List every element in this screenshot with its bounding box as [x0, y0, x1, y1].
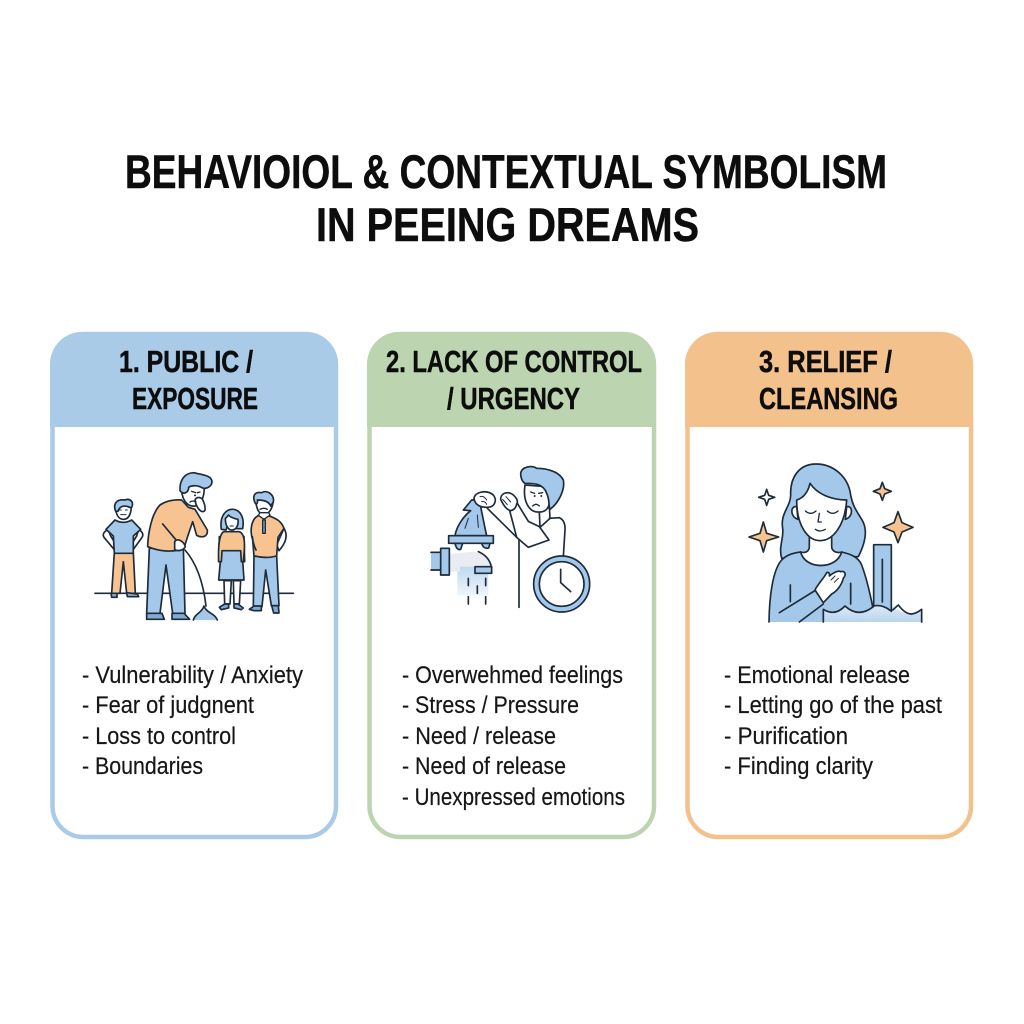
- list: public exposure meanings: - Fear of judgnent: [82, 692, 254, 719]
- heading: 2. LACK OF CONTROL: [386, 345, 642, 379]
- icon: person, overflowing faucet and clock: [431, 467, 590, 612]
- card frame: [688, 334, 971, 837]
- heading: CLEANSING: [759, 382, 898, 416]
- list: lack of control meanings: - Need of release: [402, 753, 566, 780]
- list: lack of control meanings: - Need / release: [402, 723, 556, 750]
- icon: calm woman with sparkles and water: [749, 464, 922, 622]
- heading: [386, 345, 642, 416]
- heading: EXPOSURE: [132, 382, 258, 416]
- heading: 3. RELIEF /: [759, 345, 892, 379]
- panel: public exposure: [50, 332, 338, 837]
- list: relief cleansing meanings: - Letting go of the past: [724, 692, 942, 719]
- panel: relief cleansing: [685, 332, 973, 837]
- heading: [119, 345, 258, 416]
- list: relief cleansing meanings: - Purification: [724, 723, 848, 750]
- list: public exposure meanings: - Boundaries: [82, 753, 203, 780]
- list: public exposure meanings: - Vulnerability / Anxiety: [82, 662, 304, 689]
- list: public exposure meanings: [82, 662, 304, 780]
- list: lack of control meanings: - Unexpressed emotions: [402, 784, 625, 811]
- list: lack of control meanings: [402, 662, 625, 811]
- header band: [685, 332, 973, 427]
- heading: [759, 345, 898, 416]
- icon: embarrassed man watched by onlookers: [95, 473, 293, 620]
- header band: [50, 332, 338, 427]
- title: IN PEEING DREAMS: [316, 198, 699, 251]
- header band: [367, 332, 656, 427]
- heading: 1. PUBLIC /: [119, 345, 253, 379]
- panel: lack of control: [367, 332, 656, 837]
- list: relief cleansing meanings: - Finding clarity: [724, 753, 874, 780]
- list: lack of control meanings: - Overwehmed feelings: [402, 662, 623, 689]
- list: relief cleansing meanings: - Emotional release: [724, 662, 910, 689]
- list: lack of control meanings: - Stress / Pressure: [402, 692, 579, 719]
- card frame: [52, 334, 336, 837]
- list: relief cleansing meanings: [724, 662, 942, 780]
- title: [125, 145, 887, 251]
- list: public exposure meanings: - Loss to control: [82, 723, 236, 750]
- card frame: [370, 334, 654, 837]
- heading: / URGENCY: [447, 382, 580, 416]
